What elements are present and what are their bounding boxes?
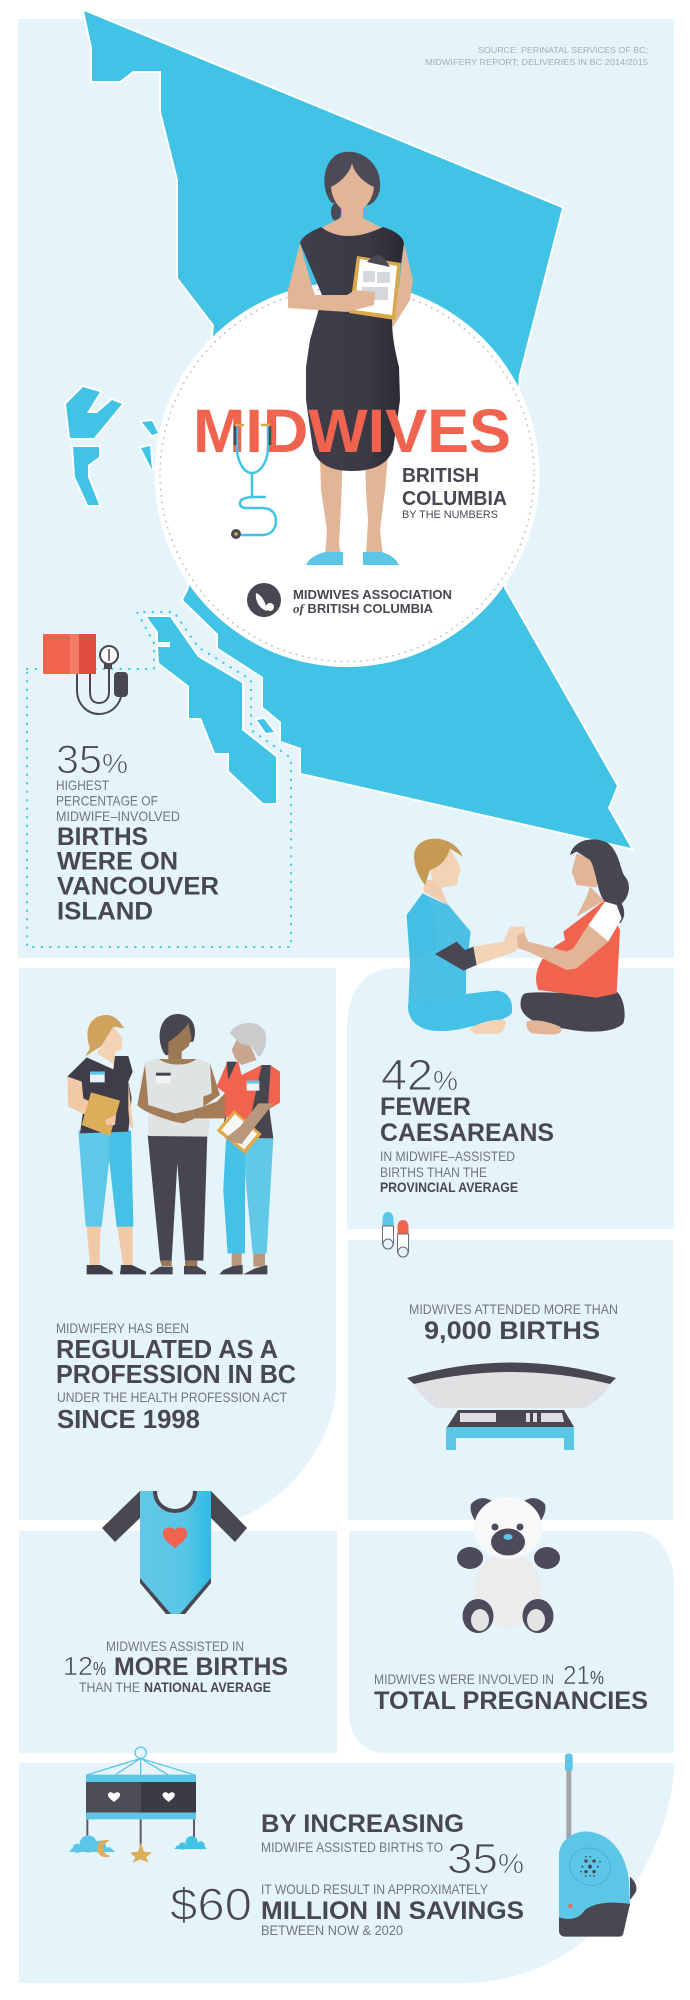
- woman red top: [536, 900, 620, 998]
- stat: 35% Vancouver Island: HIGHEST: [56, 777, 109, 793]
- midwife sleeve: [435, 942, 477, 971]
- map of British Columbia: [66, 11, 631, 848]
- panel: 9,000 births: [348, 1240, 673, 1520]
- woman neck: [577, 887, 604, 917]
- icon: baby onesie: [102, 1491, 247, 1614]
- subtitle: British Columbia by the numbers: BRITISH: [402, 464, 479, 487]
- neck and chest: [321, 205, 382, 239]
- map: coastal fragment lower: [141, 446, 152, 470]
- stat: 21% total pregnancies: %: [590, 1668, 604, 1688]
- icon: stethoscope: [231, 425, 276, 539]
- illustration: three midwives: [67, 1014, 280, 1274]
- woman hair: [570, 839, 629, 923]
- bun and hair: [331, 203, 341, 221]
- stat: 42% fewer caesareans: IN MIDWIFE–ASSISTED: [380, 1148, 515, 1164]
- face: [331, 163, 374, 213]
- stat: 42% fewer caesareans: %: [433, 1065, 458, 1096]
- panel: total pregnancies: [349, 1531, 674, 1753]
- stat: regulated as a profession: UNDER THE HEALTH PROFESSION ACT: [57, 1389, 287, 1405]
- title: MIDWIVES: MIDWIVES: [193, 397, 511, 465]
- midwife forearm: [473, 927, 525, 965]
- stat: savings: [170, 1810, 524, 1938]
- clipboard: [349, 256, 401, 320]
- stat: savings: MILLION IN SAVINGS: [261, 1897, 524, 1925]
- icon: baby scale: [407, 1362, 616, 1450]
- stat: 21% total pregnancies: 21: [563, 1660, 590, 1690]
- icon: blood pressure cuff: [43, 634, 128, 714]
- logo: Midwives Association of British Columbia: MIDWIVES ASSOCIATION: [293, 588, 452, 602]
- stat: 35% Vancouver Island: WERE ON: [57, 848, 178, 876]
- dress: [300, 227, 404, 471]
- stat: savings: $60: [170, 1879, 252, 1930]
- stat: savings: IT WOULD RESULT IN APPROXIMATELY: [261, 1881, 489, 1897]
- icon: baby mobile: [69, 1747, 207, 1863]
- map: Haida Gwaii north: [66, 387, 122, 438]
- middle woman: [137, 1014, 220, 1274]
- stat: 12% more births: MIDWIVES ASSISTED IN: [106, 1638, 244, 1654]
- illustration: midwife with clipboard: [288, 152, 413, 565]
- woman arm: [517, 925, 608, 970]
- stat: 42% fewer caesareans: PROVINCIAL AVERAGE: [380, 1179, 518, 1195]
- subtitle: British Columbia by the numbers: [402, 464, 507, 521]
- panel: 12% more births: [19, 1531, 337, 1753]
- stat: 12% more births: MORE BIRTHS: [114, 1653, 288, 1681]
- stat: 12% more births: [63, 1638, 288, 1695]
- midwife pants: [408, 991, 512, 1031]
- icon: red pin: [398, 1220, 408, 1257]
- stat: regulated as a profession: REGULATED AS A: [56, 1334, 278, 1364]
- stat: 9,000 births: 9,000 BIRTHS: [424, 1317, 600, 1345]
- map: coastal fragment upper: [142, 421, 158, 435]
- woman legs: [521, 992, 625, 1032]
- subtitle: British Columbia by the numbers: BY THE NUMBERS: [402, 509, 498, 521]
- stat: 35% Vancouver Island: [56, 738, 219, 926]
- stat: 35% Vancouver Island: ISLAND: [57, 898, 153, 926]
- dotted outline around Vancouver Island box: [27, 612, 291, 947]
- stat: savings: BETWEEN NOW & 2020: [261, 1922, 403, 1938]
- stat: regulated as a profession: [56, 1320, 296, 1434]
- woman foot: [526, 1020, 561, 1034]
- panel: regulated profession: [19, 968, 336, 1520]
- icon: baby monitor: [559, 1753, 636, 1937]
- title circle: [154, 282, 540, 667]
- stat: 21% total pregnancies: [374, 1660, 648, 1715]
- panel: hero map background: [18, 19, 674, 958]
- panel: fewer caesareans: [347, 968, 674, 1229]
- source note: MIDWIFERY REPORT; DELIVERIES IN BC 2014/2015: [425, 57, 648, 67]
- stat: 21% total pregnancies: TOTAL PREGNANCIES: [374, 1687, 648, 1715]
- logo: Midwives Association of British Columbia: [247, 583, 452, 617]
- stat: regulated as a profession: MIDWIFERY HAS BEEN: [56, 1320, 189, 1336]
- stat: 35% Vancouver Island: 35: [56, 738, 102, 782]
- stat: savings: 35: [447, 1835, 498, 1883]
- midwife hair: [414, 839, 463, 885]
- right woman: [192, 1023, 280, 1274]
- stat: 42% fewer caesareans: FEWER: [380, 1093, 471, 1121]
- shoes: [306, 552, 343, 565]
- stat: savings: BY INCREASING: [261, 1810, 464, 1838]
- stat: 35% Vancouver Island: PERCENTAGE OF: [56, 792, 158, 808]
- illustration: midwife and pregnant woman seated: [407, 839, 629, 1034]
- midwife top: [407, 893, 471, 1003]
- panel: savings: [19, 1763, 674, 1983]
- map: Haida Gwaii south: [73, 447, 99, 505]
- stat: regulated as a profession: PROFESSION IN BC: [56, 1359, 296, 1389]
- subtitle: British Columbia by the numbers: COLUMBIA: [402, 487, 507, 510]
- stat: 42% fewer caesareans: BIRTHS THAN THE: [380, 1164, 487, 1180]
- stat: 35% Vancouver Island: %: [102, 748, 128, 779]
- stat: 42% fewer caesareans: [380, 1051, 554, 1195]
- legs: [320, 455, 343, 557]
- stat: 35% Vancouver Island: MIDWIFE–INVOLVED: [56, 808, 180, 824]
- left woman: [67, 1015, 146, 1274]
- right arm: [386, 243, 413, 327]
- midwife foot: [470, 1020, 505, 1034]
- stat: 12% more births: THAN THE: [79, 1679, 140, 1695]
- map: Vancouver Island: [147, 617, 276, 803]
- map: small island: [257, 719, 274, 733]
- stat: 9,000 births: [409, 1301, 618, 1345]
- stat: 35% Vancouver Island: VANCOUVER: [57, 872, 219, 900]
- stat: savings: MIDWIFE ASSISTED BIRTHS TO: [261, 1839, 443, 1855]
- logo: Midwives Association of British Columbia: of BRITISH COLUMBIA: [293, 602, 433, 616]
- stat: 12% more births: NATIONAL AVERAGE: [144, 1679, 271, 1695]
- stat: 42% fewer caesareans: CAESAREANS: [380, 1119, 554, 1147]
- stat: 9,000 births: MIDWIVES ATTENDED MORE THAN: [409, 1301, 618, 1317]
- woman sleeve: [588, 902, 622, 942]
- left arm and hand: [288, 243, 375, 312]
- midwife neck and face: [423, 880, 448, 905]
- source note: SOURCE: PERINATAL SERVICES OF BC;: [478, 45, 648, 55]
- icon: blue pin: [382, 1212, 394, 1249]
- icon: teddy bear: [457, 1497, 560, 1633]
- source note: [425, 45, 648, 67]
- stat: 12% more births: %: [93, 1659, 106, 1679]
- stat: 12% more births: 12: [63, 1651, 93, 1681]
- stat: 21% total pregnancies: MIDWIVES WERE INVOLVED IN: [374, 1671, 554, 1687]
- stat: savings: %: [498, 1848, 524, 1879]
- stat: 35% Vancouver Island: BIRTHS: [57, 823, 148, 851]
- woman face: [572, 853, 599, 887]
- stat: regulated as a profession: SINCE 1998: [57, 1404, 200, 1434]
- stat: 42% fewer caesareans: 42: [381, 1051, 433, 1100]
